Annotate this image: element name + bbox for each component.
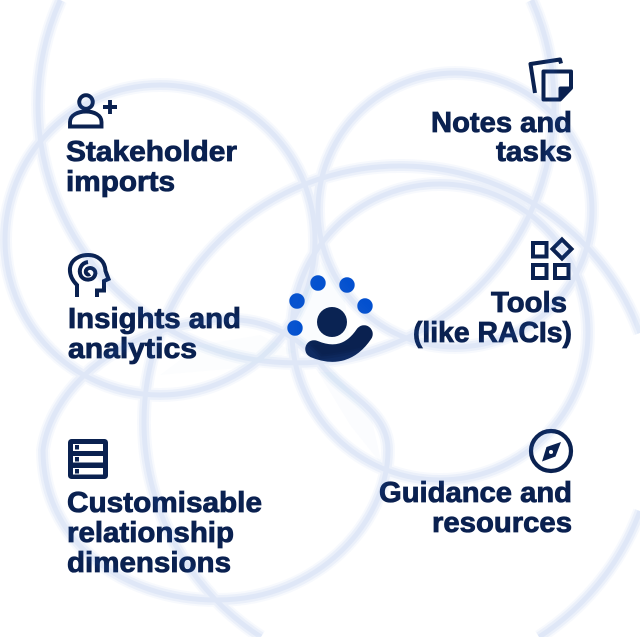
label: insights and analytics bbox=[68, 303, 241, 365]
icon: sticky notes bbox=[530, 60, 571, 100]
item: tools bbox=[413, 240, 572, 349]
item: guidance and resources bbox=[379, 431, 572, 539]
label: notes and tasks: tasks bbox=[496, 136, 572, 168]
label: customisable relationship dimensions bbox=[67, 487, 262, 579]
icon: head with spiral bbox=[70, 255, 108, 297]
icon: compass bbox=[531, 431, 571, 471]
logo bbox=[287, 275, 373, 353]
label: notes and tasks bbox=[431, 107, 572, 168]
label: tools like racis: (like RACIs) bbox=[413, 317, 572, 349]
label: guidance and resources bbox=[379, 477, 572, 539]
label: insights and analytics: Insights and bbox=[68, 303, 241, 335]
label: tools like racis bbox=[413, 287, 572, 349]
label: guidance and resources: resources bbox=[432, 507, 572, 539]
label: customisable relationship dimensions: relationship bbox=[67, 517, 234, 549]
label: insights and analytics: analytics bbox=[68, 333, 197, 365]
item: insights and analytics bbox=[68, 255, 241, 365]
icon: person with plus bbox=[70, 95, 117, 126]
label: customisable relationship dimensions: dimensions bbox=[67, 547, 231, 579]
item: notes and tasks bbox=[431, 60, 572, 168]
item: customisable relationship dimensions bbox=[67, 439, 262, 579]
label: stakeholder imports bbox=[66, 136, 237, 198]
label: stakeholder imports: imports bbox=[66, 166, 175, 198]
label: guidance and resources: Guidance and bbox=[379, 477, 572, 509]
label: stakeholder imports: Stakeholder bbox=[66, 136, 237, 168]
label: notes and tasks: Notes and bbox=[431, 107, 572, 139]
item: stakeholder imports bbox=[66, 95, 237, 198]
label: customisable relationship dimensions: Customisable bbox=[67, 487, 262, 519]
icon: server rows bbox=[68, 439, 108, 479]
icon: shapes grid bbox=[533, 240, 572, 278]
label: tools like racis: Tools bbox=[491, 287, 567, 319]
